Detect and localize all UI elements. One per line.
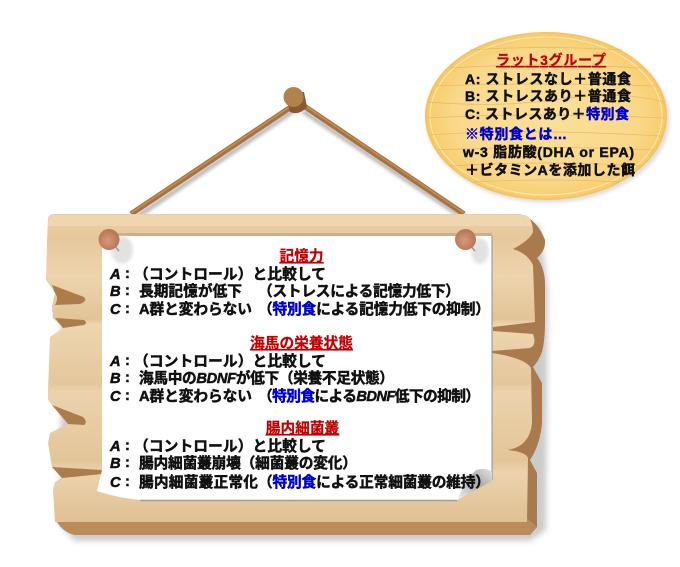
row C: C: [110, 475, 121, 491]
nail: [284, 87, 307, 113]
row A: A: [109, 267, 121, 283]
row A: （コントロール）と比較して: [134, 353, 326, 370]
row B: :: [125, 283, 130, 299]
row B: :: [125, 455, 130, 471]
board dark edge: [56, 216, 545, 535]
oval row A: A: ストレスなし＋普通食: [465, 71, 631, 87]
row A: （コントロール）と比較して: [134, 438, 326, 455]
hanging cord: [131, 105, 467, 220]
row A: :: [125, 353, 130, 369]
row C: :: [125, 474, 130, 490]
row C: :: [125, 388, 130, 404]
row C: （特別食によるBDNF低下の抑制）: [258, 387, 480, 405]
row A: A: [109, 439, 121, 455]
row B: B: [110, 371, 121, 387]
oval row B: B: ストレスあり＋普通食: [465, 88, 631, 104]
row B: 長期記憶が低下: [139, 282, 242, 300]
row B: B: [110, 284, 121, 300]
row C: A群と変わらない: [139, 300, 252, 318]
left notches: [52, 285, 102, 478]
pin: left: [98, 229, 120, 251]
row B: B: [110, 456, 121, 472]
row B: 腸内細菌叢崩壊（細菌叢の変化）: [139, 454, 357, 472]
heading: hippocampus: 海馬の栄養状態: [250, 334, 353, 352]
row C: C: [110, 302, 121, 318]
pin shadows: [111, 236, 133, 264]
row C: [110, 300, 490, 318]
paper fold: [457, 469, 492, 500]
row B: [110, 282, 460, 300]
oval note heading: ※特別食とは…: [465, 126, 567, 142]
row C: （特別食による記憶力低下の抑制）: [258, 300, 490, 318]
row C: C: [110, 389, 121, 405]
wood grain: [427, 48, 665, 182]
pin: right: [455, 229, 476, 251]
section: hippocampus nutrition: [109, 334, 480, 405]
board bottom face: [55, 518, 537, 535]
oval note line 2: ＋ビタミンAを添加した餌: [465, 162, 635, 178]
oval row C: C: ストレスあり＋特別食: [465, 106, 629, 122]
row A: （コントロール）と比較して: [134, 266, 326, 283]
row C: [110, 473, 490, 491]
row B: （ストレスによる記憶力低下）: [258, 282, 460, 300]
row A: :: [125, 266, 130, 282]
row B: 海馬中のBDNFが低下（栄養不足状態）: [139, 369, 394, 387]
row C: :: [125, 301, 130, 317]
section: gut flora: [109, 419, 490, 491]
row A: A: [109, 354, 121, 370]
wooden oval panel: [425, 32, 670, 203]
heading: memory: 記憶力: [279, 247, 324, 265]
paper: [97, 236, 492, 500]
board planks: [46, 214, 535, 522]
oval heading: ラット3グループ: [496, 52, 606, 68]
heading: gut flora: 腸内細菌叢: [266, 419, 340, 437]
row C: A群と変わらない: [139, 387, 252, 405]
row B: :: [125, 370, 130, 386]
section: memory: [109, 247, 490, 318]
oval note line 1: w-3 脂肪酸(DHA or EPA): [462, 144, 634, 160]
row C: （特別食による正常細菌叢の維持）: [258, 473, 490, 491]
row A: :: [125, 438, 130, 454]
row C: [110, 387, 480, 405]
board top highlight: [48, 215, 532, 226]
board shadow: [60, 225, 548, 541]
wooden board: [46, 214, 548, 541]
row C: 腸内細菌叢正常化: [139, 473, 258, 491]
